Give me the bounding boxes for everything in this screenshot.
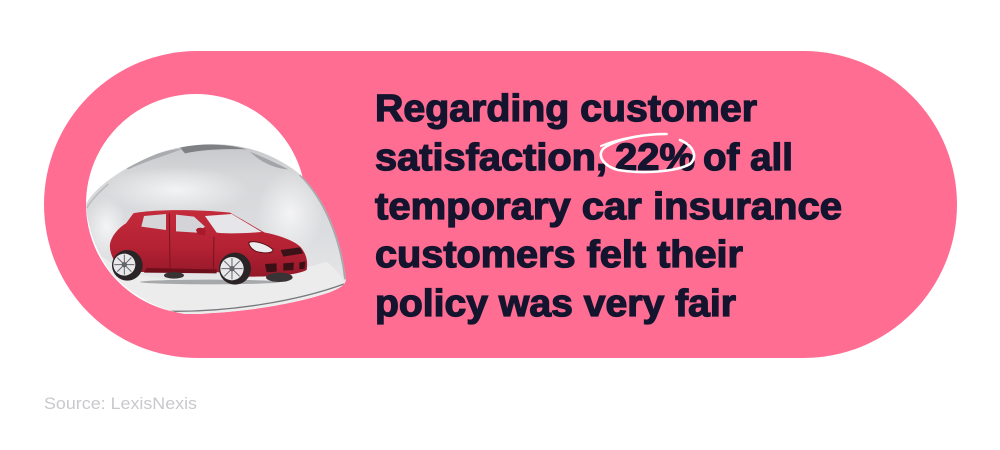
heading: customer satisfaction statement: temporary car insurance [375,186,842,228]
panel: pink pill background [44,51,957,358]
glass dome [83,140,350,320]
heading: customer satisfaction statement: 22% [615,137,695,179]
heading: customer satisfaction statement: policy was very fair [375,283,736,325]
white circle behind dome [86,94,306,314]
source note: Source: LexisNexis [44,395,197,413]
red toy car [110,210,307,285]
heading: customer satisfaction statement: satisfaction, [375,137,607,179]
heading: customer satisfaction statement [375,88,842,325]
heading: customer satisfaction statement: of all [703,137,793,179]
heading: customer satisfaction statement: Regarding customer [375,88,757,130]
wheels [112,250,251,285]
car shadow [140,280,280,284]
scribble circle around 22% [601,134,694,172]
heading: customer satisfaction statement: customers felt their [375,234,743,276]
image: toy car under glass dome [83,94,350,320]
